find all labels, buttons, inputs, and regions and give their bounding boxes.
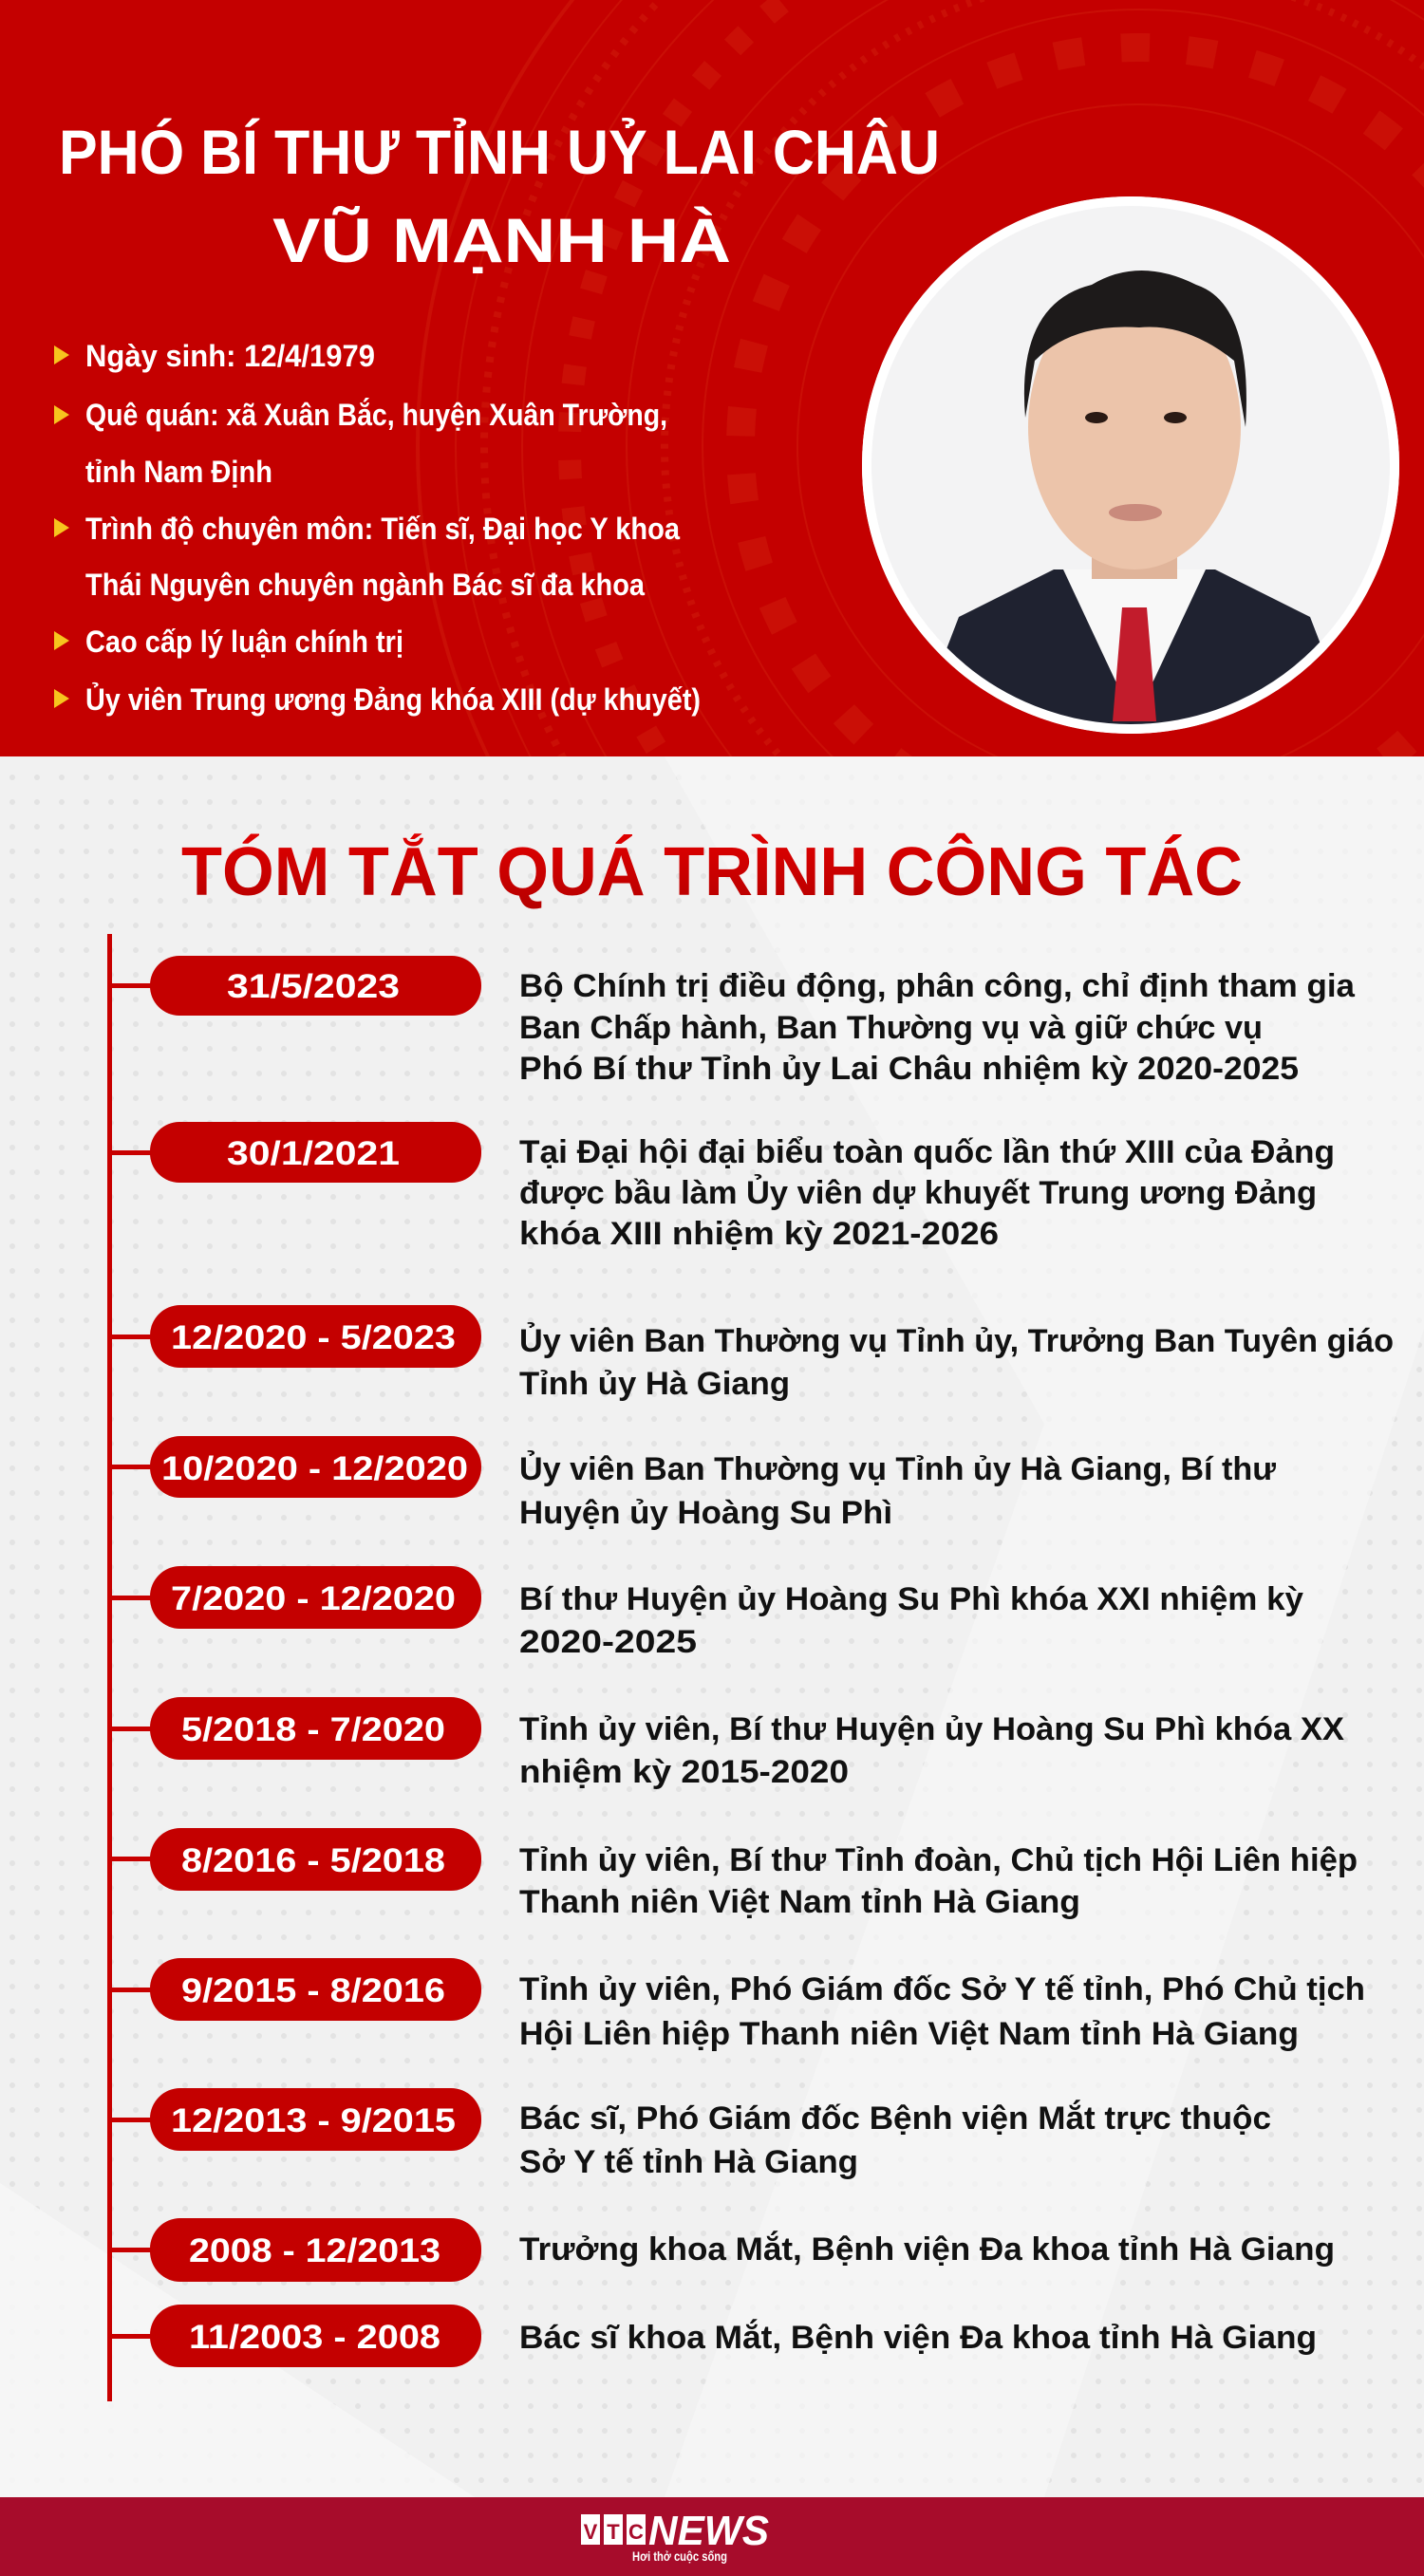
logo: VTC NEWS: T xyxy=(607,2520,620,2544)
footer xyxy=(0,2497,1424,2576)
entry 9: 12/2013 - 9/2015: Bác sĩ, Phó Giám đốc Bệnh viện Mắt trực thuộc xyxy=(519,2100,1271,2137)
entry 10: 2008 - 12/2013 xyxy=(109,2218,1335,2282)
section title: TÓM TẮT QUÁ TRÌNH CÔNG TÁC xyxy=(181,833,1243,910)
entry 1: 31/5/2023: Bộ Chính trị điều động, phân công, chỉ định tham gia xyxy=(519,968,1356,1004)
entry 5: 7/2020 - 12/2020: 2020-2025 xyxy=(519,1624,697,1660)
entry 2: 30/1/2021: được bầu làm Ủy viên dự khuyết Trung ương Đảng xyxy=(519,1175,1317,1211)
entry 2: 30/1/2021: Tại Đại hội đại biểu toàn quốc lần thứ XIII của Đảng xyxy=(519,1134,1335,1170)
entry 6: 5/2018 - 7/2020: nhiệm kỳ 2015-2020 xyxy=(519,1754,849,1790)
title xyxy=(59,117,940,275)
entry 3: 12/2020 - 5/2023: Ủy viên Ban Thường vụ Tỉnh ủy, Trưởng Ban Tuyên giáo xyxy=(519,1323,1394,1359)
entry 4: 10/2020 - 12/2020: Ủy viên Ban Thường vụ Tỉnh ủy Hà Giang, Bí thư xyxy=(519,1451,1276,1487)
entry 4: 10/2020 - 12/2020 xyxy=(109,1436,1276,1531)
entry 4: 10/2020 - 12/2020: 10/2020 - 12/2020 xyxy=(161,1450,468,1487)
entry 8: 9/2015 - 8/2016: Hội Liên hiệp Thanh niên Việt Nam tỉnh Hà Giang xyxy=(519,2016,1299,2052)
entry 9: 12/2013 - 9/2015: Sở Y tế tỉnh Hà Giang xyxy=(519,2144,858,2180)
entry 6: 5/2018 - 7/2020 xyxy=(109,1697,1344,1790)
entry 5: 7/2020 - 12/2020 xyxy=(109,1566,1303,1660)
bio bullet list: tỉnh Nam Định xyxy=(85,455,272,489)
entry 8: 9/2015 - 8/2016 xyxy=(109,1958,1365,2052)
entry 9: 12/2013 - 9/2015: 12/2013 - 9/2015 xyxy=(171,2102,456,2139)
entry 11: 11/2003 - 2008: 11/2003 - 2008 xyxy=(189,2319,440,2356)
entry 3: 12/2020 - 5/2023 xyxy=(109,1305,1394,1402)
title: VŨ MẠNH HÀ xyxy=(272,205,731,275)
entry 1: 31/5/2023: Ban Chấp hành, Ban Thường vụ và giữ chức vụ xyxy=(519,1010,1263,1046)
timeline entries xyxy=(109,956,1394,2367)
logo: VTC NEWS: NEWS xyxy=(648,2508,769,2554)
entry 7: 8/2016 - 5/2018: Thanh niên Việt Nam tỉnh Hà Giang xyxy=(519,1884,1080,1920)
entry 11: 11/2003 - 2008: Bác sĩ khoa Mắt, Bệnh viện Đa khoa tỉnh Hà Giang xyxy=(519,2320,1317,2356)
entry 1: 31/5/2023: 31/5/2023 xyxy=(227,968,400,1005)
timeline vertical line xyxy=(107,934,112,2401)
logo: VTC NEWS xyxy=(581,2508,769,2564)
entry 1: 31/5/2023: Phó Bí thư Tỉnh ủy Lai Châu nhiệm kỳ 2020-2025 xyxy=(519,1051,1299,1087)
entry 2: 30/1/2021: khóa XIII nhiệm kỳ 2021-2026 xyxy=(519,1216,999,1252)
entry 3: 12/2020 - 5/2023: Tỉnh ủy Hà Giang xyxy=(519,1366,790,1402)
bio bullet list: Ủy viên Trung ương Đảng khóa XIII (dự khuyết) xyxy=(85,682,701,717)
bio bullet list: Quê quán: xã Xuân Bắc, huyện Xuân Trường, xyxy=(85,398,667,432)
entry 9: 12/2013 - 9/2015 xyxy=(109,2088,1271,2180)
entry 3: 12/2020 - 5/2023: 12/2020 - 5/2023 xyxy=(171,1319,456,1356)
entry 5: 7/2020 - 12/2020: Bí thư Huyện ủy Hoàng Su Phì khóa XXI nhiệm kỳ xyxy=(519,1581,1303,1617)
background: lower section xyxy=(0,756,1424,2497)
entry 1: 31/5/2023 xyxy=(109,956,1356,1087)
bio bullet list xyxy=(54,339,701,717)
entry 2: 30/1/2021: 30/1/2021 xyxy=(227,1135,400,1172)
bio bullet list: Trình độ chuyên môn: Tiến sĩ, Đại học Y khoa xyxy=(85,512,680,546)
header background xyxy=(0,0,1424,756)
logo: VTC NEWS: Hơi thở cuộc sống xyxy=(632,2548,727,2564)
entry 10: 2008 - 12/2013: 2008 - 12/2013 xyxy=(189,2232,440,2269)
bio bullet list: Cao cấp lý luận chính trị xyxy=(85,625,403,659)
entry 5: 7/2020 - 12/2020: 7/2020 - 12/2020 xyxy=(171,1580,456,1617)
bio bullet list: Ngày sinh: 12/4/1979 xyxy=(85,339,375,373)
logo: VTC NEWS: C xyxy=(628,2520,644,2544)
entry 7: 8/2016 - 5/2018: 8/2016 - 5/2018 xyxy=(181,1842,445,1879)
entry 2: 30/1/2021 xyxy=(109,1122,1335,1252)
entry 8: 9/2015 - 8/2016: 9/2015 - 8/2016 xyxy=(181,1972,445,2009)
entry 11: 11/2003 - 2008 xyxy=(109,2305,1317,2367)
logo: VTC NEWS: V xyxy=(584,2520,598,2544)
portrait photo xyxy=(862,196,1399,734)
title: PHÓ BÍ THƯ TỈNH UỶ LAI CHÂU xyxy=(59,117,940,187)
entry 7: 8/2016 - 5/2018 xyxy=(109,1828,1358,1920)
entry 4: 10/2020 - 12/2020: Huyện ủy Hoàng Su Phì xyxy=(519,1495,892,1531)
entry 7: 8/2016 - 5/2018: Tỉnh ủy viên, Bí thư Tỉnh đoàn, Chủ tịch Hội Liên hiệp xyxy=(519,1842,1358,1878)
entry 10: 2008 - 12/2013: Trưởng khoa Mắt, Bệnh viện Đa khoa tỉnh Hà Giang xyxy=(519,2231,1335,2268)
bio bullet list: Thái Nguyên chuyên ngành Bác sĩ đa khoa xyxy=(85,568,645,602)
entry 6: 5/2018 - 7/2020: 5/2018 - 7/2020 xyxy=(181,1711,445,1748)
entry 8: 9/2015 - 8/2016: Tỉnh ủy viên, Phó Giám đốc Sở Y tế tỉnh, Phó Chủ tịch xyxy=(519,1971,1365,2007)
entry 6: 5/2018 - 7/2020: Tỉnh ủy viên, Bí thư Huyện ủy Hoàng Su Phì khóa XX xyxy=(519,1711,1344,1747)
